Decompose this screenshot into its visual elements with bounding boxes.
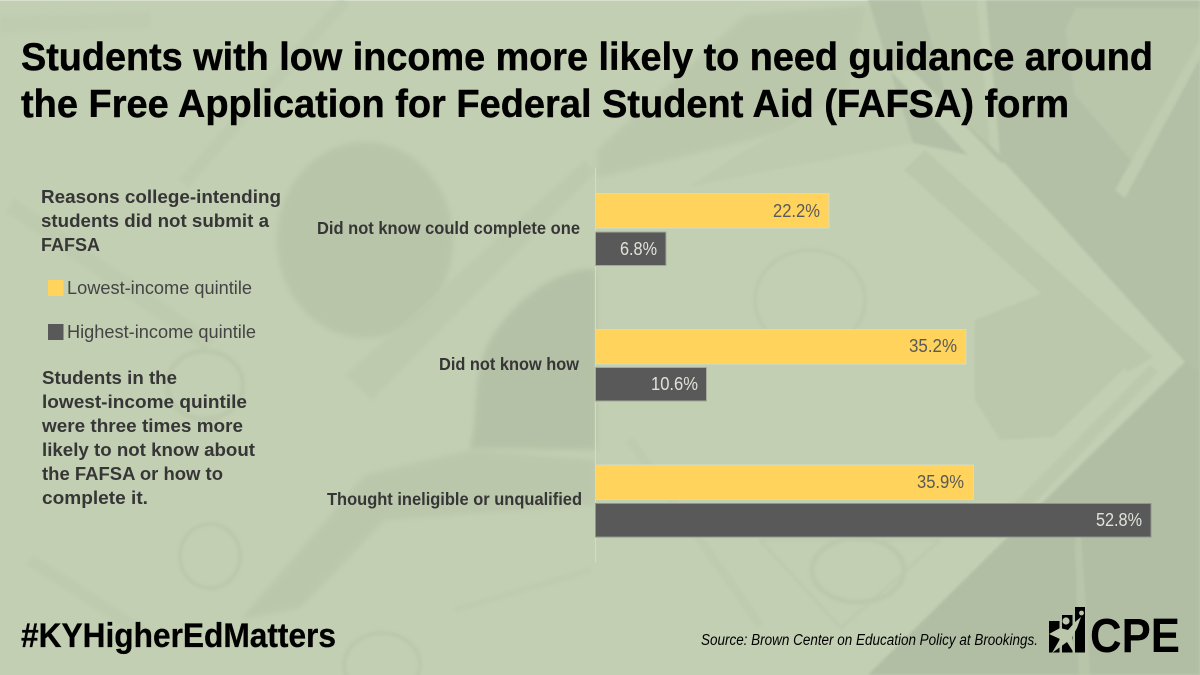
legend: lowest-income quintile: Lowest-income quintile [67, 278, 252, 298]
takeaway text: Students in the [42, 367, 177, 388]
legend heading: students did not submit a [41, 210, 270, 231]
icon: rising bars with star figure [1049, 607, 1085, 653]
faint print [0, 0, 940, 675]
CPE logo: CPE [1090, 610, 1180, 663]
group: did not know could complete one [317, 194, 829, 266]
group: did not know how: Did not know how [439, 354, 579, 374]
title [21, 36, 1153, 126]
title: the Free Application for Federal Student Aid (FAFSA) form [21, 83, 1069, 126]
group: thought ineligible or unqualified: Thought ineligible or unqualified [327, 489, 582, 509]
group: did not know could complete one: 6.8% [620, 239, 657, 259]
group: did not know how: 10.6% [651, 374, 698, 394]
legend: highest-income quintile: Highest-income quintile [67, 322, 256, 342]
group: did not know could complete one: 22.2% [773, 201, 820, 221]
right dark mass and top-right bills [688, 0, 1200, 675]
legend heading: Reasons college-intending [41, 186, 281, 207]
takeaway text: likely to not know about [42, 439, 255, 460]
group: thought ineligible or unqualified [327, 465, 1151, 537]
group: thought ineligible or unqualified: 52.8% [1096, 510, 1142, 530]
group: did not know could complete one: Did not know could complete one [317, 218, 580, 238]
soft portrait and shadow masses [240, 5, 868, 620]
takeaway text: lowest-income quintile [42, 391, 247, 412]
source note: Source: Brown Center on Education Policy at Brookings. [701, 632, 1038, 649]
takeaway text: were three times more [41, 415, 243, 436]
takeaway text: complete it. [42, 487, 148, 508]
group: did not know how [439, 330, 966, 401]
title: Students with low income more likely to need guidance around [21, 36, 1153, 79]
takeaway text [41, 367, 255, 508]
CPE logo [1049, 607, 1180, 663]
legend heading: FAFSA [41, 234, 100, 255]
legend heading [41, 186, 281, 255]
group: did not know how: 35.2% [909, 336, 957, 356]
takeaway text: the FAFSA or how to [42, 463, 223, 484]
group: thought ineligible or unqualified: 35.9% [917, 472, 964, 492]
bar chart [317, 168, 1151, 562]
hashtag: #KYHigherEdMatters [21, 617, 336, 655]
